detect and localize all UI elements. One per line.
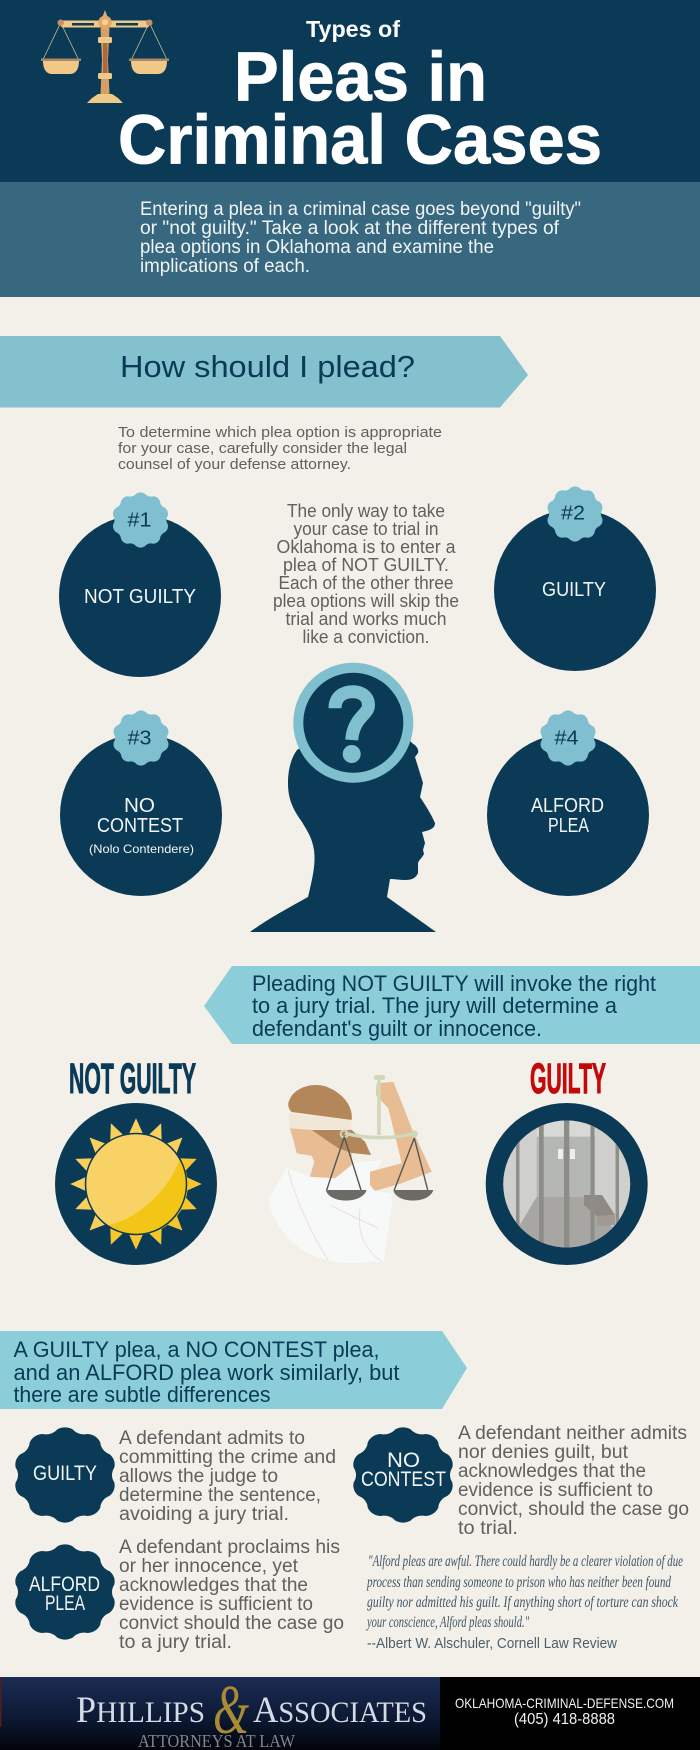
- panel: GUILTY explanation: [15, 1427, 336, 1525]
- callout: quote: --Albert W. Alschuler, Cornell Law Review: [367, 1635, 617, 1652]
- callout: quote: [366, 1553, 683, 1652]
- plea option 3: #3: [128, 728, 152, 750]
- panel: NO CONTEST explanation: [353, 1423, 689, 1539]
- text block: legal counsel: [118, 424, 442, 473]
- ribbon: jury trial: [204, 966, 700, 1044]
- text block: only way to trial: plea options will skip the: [273, 591, 459, 611]
- ribbon: subtle differences: there are subtle differences: [14, 1382, 270, 1407]
- panel: GUILTY explanation: committing the crime and: [119, 1447, 336, 1468]
- panel: ALFORD PLEA explanation: convict should the case go: [119, 1613, 344, 1634]
- panel: ALFORD PLEA explanation: ALFORD: [29, 1573, 100, 1596]
- icon: sun: [55, 1103, 217, 1265]
- illustration: Lady Justice: [268, 1075, 433, 1263]
- infographic: NOT GUILTY: [69, 1055, 196, 1103]
- panel: NO CONTEST explanation: NO: [387, 1449, 420, 1472]
- ribbon: subtle differences: A GUILTY plea, a NO CONTEST plea,: [14, 1337, 380, 1362]
- text block: only way to trial: [273, 501, 459, 647]
- panel: GUILTY explanation: determine the sentence,: [119, 1485, 321, 1506]
- contact details: (405) 418-8888: [514, 1711, 615, 1728]
- panel: ALFORD PLEA explanation: [15, 1537, 344, 1653]
- panel: GUILTY explanation: GUILTY: [33, 1462, 97, 1485]
- panel: NO CONTEST explanation: convict, should the case go: [458, 1499, 689, 1520]
- ribbon: subtle differences: and an ALFORD plea work similarly, but: [14, 1360, 400, 1385]
- panel: GUILTY explanation: A defendant admits to: [119, 1428, 305, 1449]
- panel: ALFORD PLEA explanation: PLEA: [45, 1592, 85, 1615]
- plea option 3: (Nolo Contendere): [89, 842, 194, 856]
- plea option 2: GUILTY: [542, 579, 606, 601]
- plea option 4: [487, 711, 649, 896]
- panel: ALFORD PLEA explanation: or her innocence, yet: [119, 1556, 299, 1577]
- icon: brass scales: [41, 10, 169, 103]
- panel: NO CONTEST explanation: nor denies guilt, but: [458, 1442, 629, 1463]
- ribbon: jury trial: defendant's guilt or innocence.: [252, 1016, 542, 1041]
- title: Types of: [306, 16, 400, 42]
- panel: NO CONTEST explanation: evidence is sufficient to: [458, 1480, 653, 1501]
- panel: ALFORD PLEA explanation: A defendant proclaims his: [119, 1537, 340, 1558]
- text block: only way to trial: your case to trial in: [294, 519, 438, 539]
- text block: only way to trial: like a conviction.: [302, 627, 430, 647]
- panel: footer: [0, 1672, 700, 1750]
- plea option 4: #4: [554, 728, 578, 750]
- panel: intro: Entering a plea in a criminal case goes beyond "guilty": [140, 199, 581, 220]
- ribbon: jury trial: Pleading NOT GUILTY will invoke the right: [252, 971, 656, 996]
- logo: Phillips and Associates: ASSOCIATES: [253, 1690, 427, 1731]
- panel: intro: plea options in Oklahoma and examine the: [140, 237, 494, 258]
- text block: legal counsel: counsel of your defense attorney.: [118, 456, 351, 473]
- callout: quote: your conscience, Alford pleas should.": [366, 1614, 529, 1631]
- panel: ALFORD PLEA explanation: evidence is sufficient to: [119, 1594, 313, 1615]
- panel: ALFORD PLEA explanation: acknowledges that the: [119, 1575, 308, 1596]
- plea option 4: PLEA: [548, 815, 590, 837]
- ribbon: subtle differences: [0, 1331, 467, 1409]
- text block: only way to trial: The only way to take: [287, 501, 445, 521]
- panel: NO CONTEST explanation: A defendant neither admits: [458, 1423, 687, 1444]
- panel: intro: or "not guilty." Take a look at the different types of: [140, 218, 560, 239]
- text block: legal counsel: for your case, carefully consider the legal: [118, 440, 407, 457]
- text block: only way to trial: plea of NOT GUILTY.: [283, 555, 449, 575]
- ribbon: jury trial: to a jury trial. The jury will determine a: [252, 993, 618, 1018]
- icon: head silhouette with question mark: [250, 668, 436, 932]
- plea option 1: NOT GUILTY: [84, 586, 196, 608]
- title: Criminal Cases: [118, 100, 602, 178]
- text block: only way to trial: Oklahoma is to enter a: [276, 537, 456, 557]
- title: [118, 16, 602, 178]
- plea option 1: #1: [128, 510, 152, 532]
- plea option 3: CONTEST: [97, 815, 183, 837]
- panel: intro: [0, 182, 700, 297]
- plea option 2: #2: [561, 502, 585, 524]
- logo: Phillips and Associates: PHILLIPS: [76, 1690, 205, 1731]
- plea option 2: [494, 487, 656, 671]
- ribbon heading: How should I plead?: [0, 336, 528, 408]
- panel: GUILTY explanation: allows the judge to: [119, 1466, 278, 1487]
- title: Pleas in: [234, 38, 487, 116]
- logo: Phillips and Associates: &: [213, 1672, 249, 1749]
- plea option 4: ALFORD: [531, 795, 604, 817]
- panel: NO CONTEST explanation: CONTEST: [361, 1468, 446, 1491]
- text block: legal counsel: To determine which plea option is appropriate: [118, 424, 442, 441]
- infographic: GUILTY: [530, 1055, 606, 1103]
- panel: NO CONTEST explanation: acknowledges that the: [458, 1461, 646, 1482]
- panel: intro: implications of each.: [140, 256, 310, 277]
- icon: jail cell: [486, 1103, 648, 1265]
- panel: NO CONTEST explanation: to trial.: [458, 1518, 518, 1539]
- panel: ALFORD PLEA explanation: to a jury trial.: [119, 1632, 232, 1653]
- plea option 3: [60, 711, 222, 896]
- panel: GUILTY explanation: avoiding a jury trial.: [119, 1504, 289, 1525]
- contact details: [455, 1695, 674, 1728]
- plea option 3: NO: [124, 795, 155, 817]
- panel: header: [0, 0, 700, 182]
- text block: only way to trial: Each of the other three: [278, 573, 454, 593]
- ribbon heading: How should I plead?: How should I plead?: [120, 349, 415, 384]
- logo: Phillips and Associates: [76, 1672, 427, 1750]
- text block: only way to trial: trial and works much: [286, 609, 446, 629]
- plea option 1: [59, 493, 221, 677]
